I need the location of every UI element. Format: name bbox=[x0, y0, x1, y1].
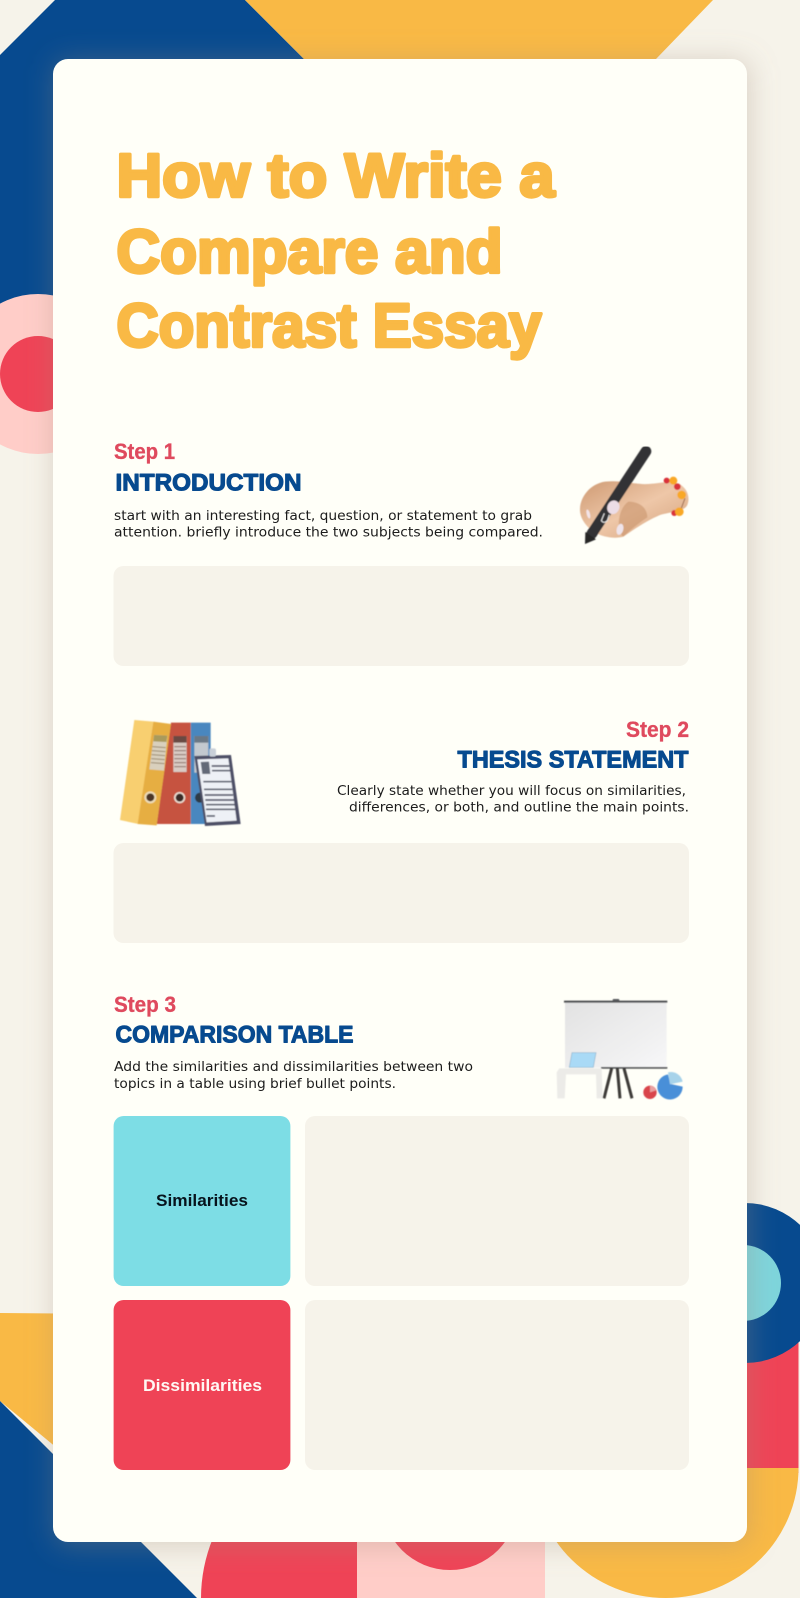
panel: similarities label bbox=[114, 1116, 290, 1286]
panel: dissimilarities label bbox=[114, 1300, 290, 1470]
panel: dissimilarities content box bbox=[305, 1300, 689, 1470]
shape: left red circle bbox=[0, 336, 76, 412]
step 2 text: THESIS STATEMENT bbox=[458, 746, 689, 774]
panel: step 1 answer box bbox=[114, 566, 689, 666]
panel: similarities label: Similarities bbox=[156, 1192, 248, 1210]
shape: bottom pink rectangle bbox=[357, 1450, 545, 1598]
title: How to Write a bbox=[116, 142, 556, 210]
shape: bottom-left blue triangle bbox=[0, 1401, 197, 1598]
shape: bottom red circle bbox=[382, 1434, 518, 1570]
icon: hand writing with pen bbox=[580, 451, 688, 544]
shape: bottom red quarter circle bbox=[201, 1442, 357, 1598]
shape: top-left blue bbox=[0, 0, 304, 380]
step 1 text: INTRODUCTION bbox=[116, 470, 302, 496]
step 2 text: Clearly state whether you will focus on similarities, bbox=[337, 784, 686, 799]
step 3 text: COMPARISON TABLE bbox=[116, 1022, 354, 1048]
panel: similarities content box bbox=[305, 1116, 689, 1286]
step 3 text: topics in a table using brief bullet points. bbox=[114, 1077, 396, 1092]
title bbox=[116, 142, 556, 360]
shape: bottom-right yellow half circle bbox=[533, 1468, 798, 1598]
shape: right cyan circle bbox=[705, 1245, 781, 1321]
step 1 text: attention. briefly introduce the two subjects being compared. bbox=[114, 526, 543, 540]
step 3 text: Add the similarities and dissimilarities between two bbox=[114, 1060, 473, 1075]
shape: right blue circle bbox=[665, 1203, 800, 1363]
title: Compare and bbox=[116, 218, 502, 286]
shape: left pink circle bbox=[0, 294, 118, 454]
icon: presentation board with charts bbox=[557, 999, 683, 1099]
step 1 text: start with an interesting fact, question, or statement to grab bbox=[114, 509, 532, 524]
panel: dissimilarities label: Dissimilarities bbox=[143, 1377, 262, 1395]
step 3 text: Step 3 bbox=[114, 992, 176, 1017]
step 2 text: differences, or both, and outline the main points. bbox=[349, 800, 689, 816]
shape: bottom-left yellow bbox=[0, 1313, 120, 1500]
panel: step 2 answer box bbox=[114, 843, 689, 943]
shape: right red rectangle bbox=[700, 1283, 798, 1473]
title: Contrast Essay bbox=[116, 292, 542, 360]
step 2 text bbox=[337, 717, 689, 816]
step 2 text: Step 2 bbox=[626, 717, 689, 742]
step 1 text bbox=[114, 439, 543, 540]
step 1 text: Step 1 bbox=[114, 439, 175, 464]
shape: top yellow bbox=[245, 0, 713, 120]
step 3 text bbox=[114, 992, 473, 1092]
icon: binders and clipboard bbox=[120, 720, 241, 826]
